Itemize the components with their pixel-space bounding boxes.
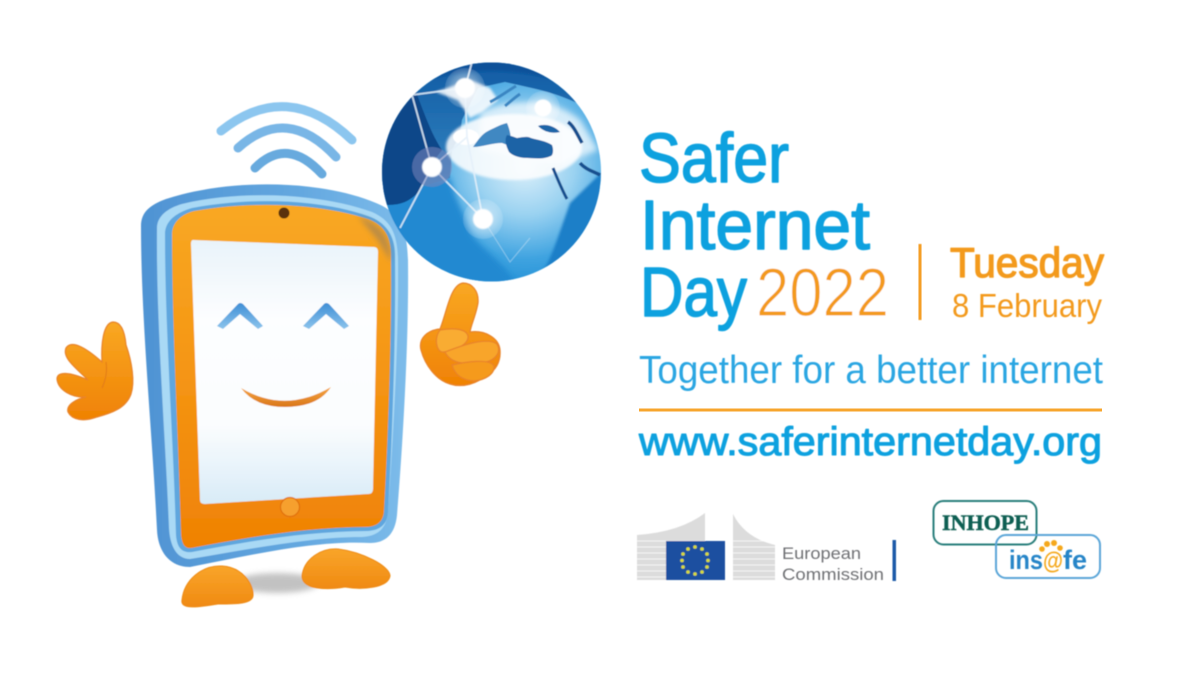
eastern Mediterranean <box>506 135 553 158</box>
western Mediterranean <box>473 123 511 147</box>
illustration: tablet mascot with globe <box>57 60 610 607</box>
icon: globe <box>375 60 610 290</box>
EU flag <box>666 541 725 580</box>
icon: left hand <box>57 322 133 420</box>
logo: insafe: @ <box>1043 548 1063 575</box>
tablet screen <box>191 240 378 504</box>
horizontal rule <box>639 408 1102 412</box>
tablet inner blue edge <box>165 201 395 552</box>
European Commission wordmark: European <box>782 544 861 563</box>
date: Tuesday 8 February: Tuesday <box>950 239 1104 286</box>
Baltic and Bay of Biscay <box>490 86 520 106</box>
north Atlantic mid blue <box>382 62 576 190</box>
title: Safer Internet Day: Internet <box>640 186 870 264</box>
Indian Ocean side <box>542 172 602 269</box>
logo: INHOPE: INHOPE <box>942 510 1029 535</box>
shadow from globe <box>358 216 391 262</box>
icon: right hand thumbs up <box>420 283 500 386</box>
Berlaymont building right <box>733 514 775 580</box>
title: Safer Internet Day: Safer <box>639 119 789 197</box>
north land glow <box>436 80 498 118</box>
vertical divider <box>918 244 922 320</box>
upper right bright land <box>480 102 598 165</box>
smile <box>241 387 331 407</box>
tablet outer frame <box>141 184 408 567</box>
bright highlight band <box>446 114 582 180</box>
tablet light inner rim <box>157 195 398 559</box>
flag stars <box>680 545 710 576</box>
Iberia <box>453 129 479 145</box>
date: Tuesday 8 February: 8 February <box>952 287 1102 324</box>
tablet orange bezel <box>172 205 391 548</box>
logo bar <box>892 540 896 581</box>
Berlaymont building left <box>637 513 705 580</box>
ground shadow <box>235 573 319 593</box>
camera <box>278 208 290 218</box>
network lines <box>400 62 483 228</box>
left eye <box>217 303 263 329</box>
year 2022: 2022 <box>756 254 889 331</box>
icon: left foot <box>182 566 253 607</box>
Atlantic dark side <box>376 92 442 205</box>
Red Sea, Caspian and Gulf <box>553 168 567 199</box>
European Commission wordmark: Commission <box>782 565 884 584</box>
icon: wi-fi signal arcs <box>221 107 352 174</box>
logo: insafe <box>996 535 1100 578</box>
network nodes <box>445 68 485 108</box>
website URL: www.saferinternetday.org <box>638 420 1102 464</box>
logo: insafe: fe <box>1063 545 1087 575</box>
logo: insafe: ins <box>1009 545 1043 575</box>
right eye <box>303 303 349 329</box>
date: Tuesday 8 February <box>950 239 1104 324</box>
tablet body <box>141 184 408 567</box>
title: Safer Internet Day: Day <box>640 253 747 331</box>
title: Safer Internet Day <box>639 119 870 331</box>
lower Atlantic <box>386 176 514 282</box>
slogan: Together for a better internet <box>639 349 1103 392</box>
paw toes <box>1039 540 1063 552</box>
icon: right foot <box>302 549 390 589</box>
logo: INHOPE <box>934 501 1036 544</box>
face: eyes and smile <box>217 303 349 407</box>
European Commission wordmark <box>782 544 884 584</box>
logo: European Commission <box>637 513 896 584</box>
top rim dark <box>434 62 550 80</box>
Black Sea <box>538 125 560 133</box>
home button <box>280 498 300 516</box>
